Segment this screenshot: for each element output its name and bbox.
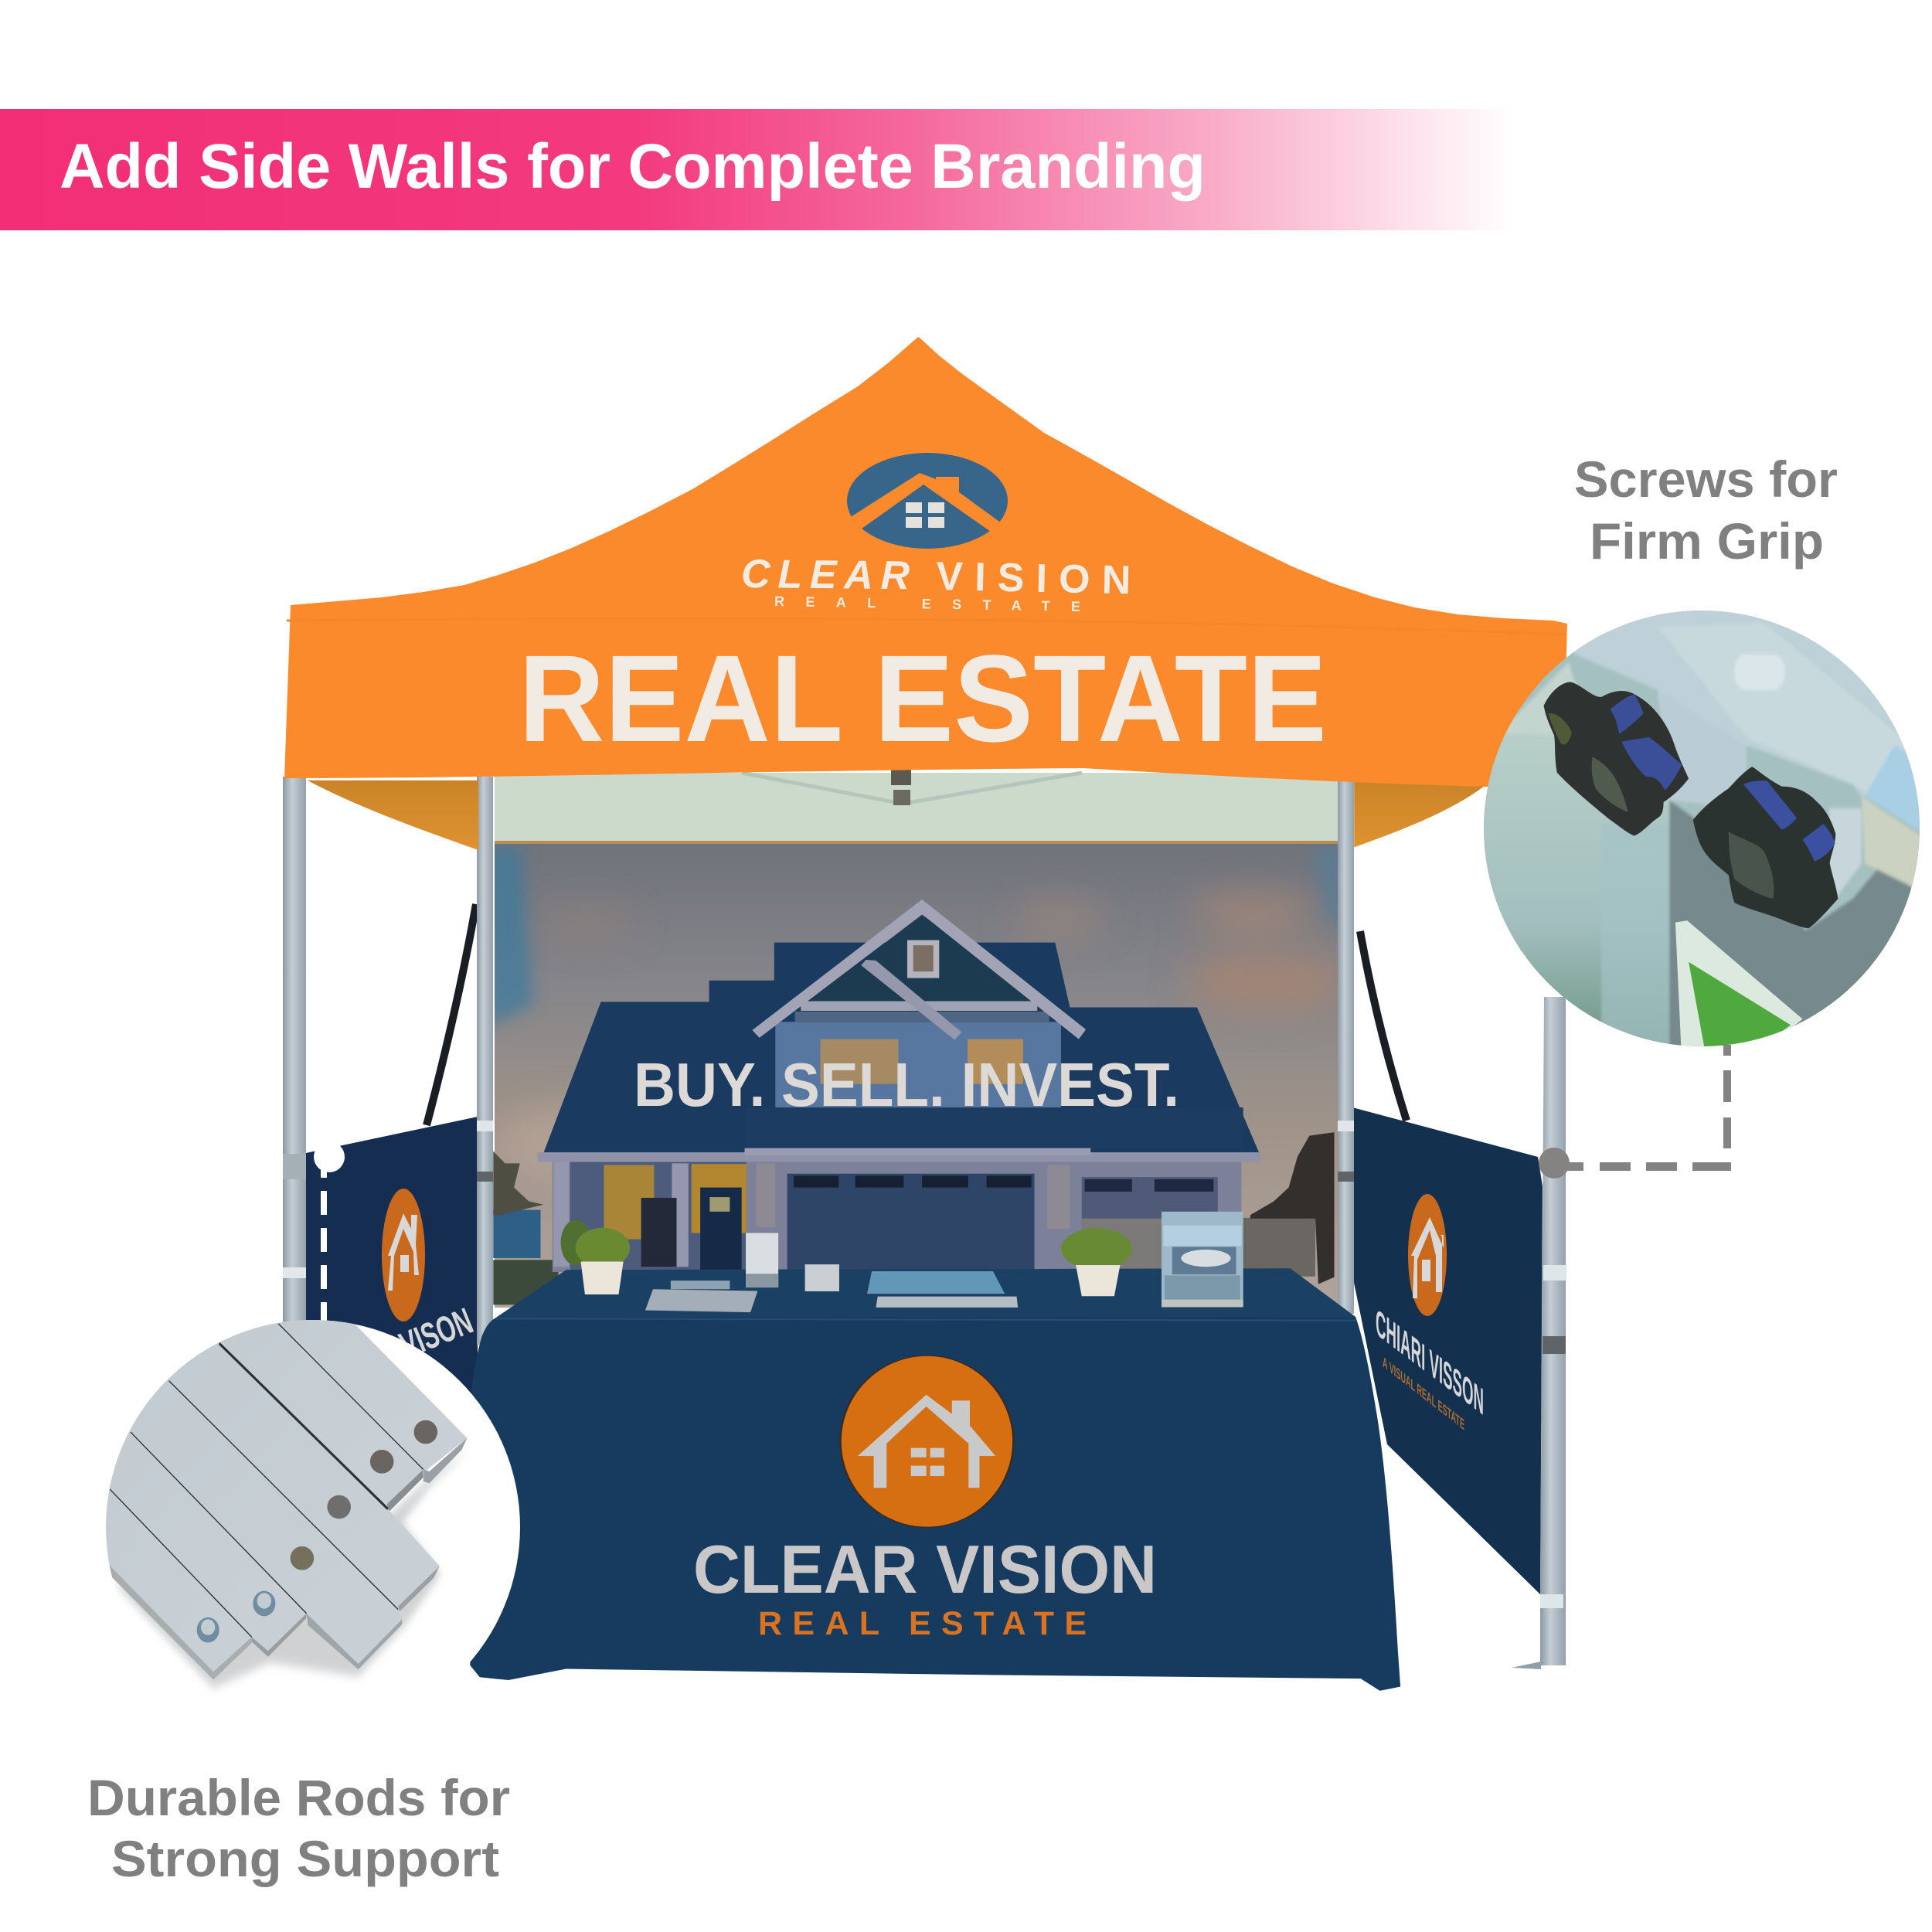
main roof — [543, 943, 1259, 1153]
slogan: BUY. SELL. INVEST. — [634, 1050, 1179, 1119]
back wall printed graphic with house — [487, 844, 1352, 1308]
lower roof and eaves — [538, 1107, 1260, 1162]
connector: left white dashed line — [314, 1141, 345, 1321]
rod B — [220, 1323, 423, 1507]
poles — [283, 777, 1566, 1669]
canopy underside — [308, 781, 1492, 850]
rod C — [168, 1342, 440, 1594]
gable — [752, 900, 1086, 1040]
canopy logo — [847, 453, 1008, 549]
garage doors — [757, 1163, 1221, 1274]
title banner — [0, 109, 1515, 230]
title text: Add Side Walls for Complete Branding — [60, 131, 1206, 202]
straps — [427, 904, 1406, 1125]
tent illustration — [283, 337, 1567, 1691]
cloth — [467, 1268, 1400, 1691]
house walls — [553, 1158, 1241, 1272]
panel: right side wall — [1352, 1107, 1543, 1594]
icon: right wall logo — [1408, 1194, 1447, 1316]
canopy brand name: VISION — [936, 554, 1131, 603]
cloth tagline: REAL ESTATE — [758, 1605, 1087, 1642]
knob left — [1544, 682, 1689, 835]
connector: right grey dashed line — [1539, 1045, 1731, 1179]
porch — [553, 1160, 747, 1270]
canopy brand name: CLEAR — [741, 552, 910, 598]
table with cloth — [467, 1212, 1400, 1691]
knob right — [1693, 767, 1838, 928]
canopy — [284, 337, 1567, 850]
detail circle: screws — [1480, 603, 1921, 1050]
canopy brand name — [741, 552, 1131, 603]
panel: right side wall: CHIARI VISSON — [1376, 1301, 1484, 1423]
rod D — [130, 1379, 402, 1663]
desk items on cloth — [581, 1212, 1243, 1312]
valance text: REAL ESTATE — [519, 629, 1327, 767]
canopy seam — [287, 618, 1566, 634]
holes and screws — [197, 1420, 437, 1643]
caption: rods: Strong Support — [111, 1830, 499, 1887]
cloth logo — [841, 1355, 1013, 1527]
plant right foliage — [1061, 1228, 1132, 1270]
detail circle: durable rods — [0, 1172, 520, 1734]
canopy tagline: REAL ESTATE — [774, 594, 1080, 614]
panel: upper back wall — [495, 770, 1341, 845]
right wall text: A VISUAL REAL ESTATE — [1383, 1352, 1464, 1434]
caption: screws — [1574, 451, 1838, 570]
dormer siding and windows — [775, 1022, 1061, 1107]
display cards — [671, 1233, 839, 1291]
canopy roof and valance — [284, 337, 1567, 788]
panel: left side wall — [306, 1117, 478, 1406]
acrylic box — [1162, 1212, 1243, 1307]
icon: left wall logo — [382, 1189, 425, 1321]
left wall text: VISON — [394, 1301, 478, 1366]
shadow under rods — [113, 1447, 471, 1689]
rod F — [106, 1490, 235, 1660]
caption: screws: Screws for — [1574, 451, 1838, 508]
green flag — [1675, 920, 1802, 1050]
photo background — [1480, 603, 1921, 1049]
caption: rods — [87, 1769, 510, 1887]
right wall text — [1376, 1301, 1484, 1434]
trees and yard behind house — [493, 1132, 1335, 1304]
cloth brand name: CLEAR VISION — [693, 1531, 1157, 1607]
caption: screws: Firm Grip — [1590, 512, 1824, 570]
caption: rods: Durable Rods for — [87, 1769, 510, 1826]
plant pots — [581, 1262, 1120, 1296]
table items behind cloth edge — [561, 1220, 1132, 1270]
rod A — [280, 1320, 467, 1471]
rod gaps — [110, 1324, 423, 1637]
plant left foliage — [561, 1220, 630, 1268]
brochures — [645, 1271, 1018, 1312]
rod E — [110, 1431, 306, 1635]
